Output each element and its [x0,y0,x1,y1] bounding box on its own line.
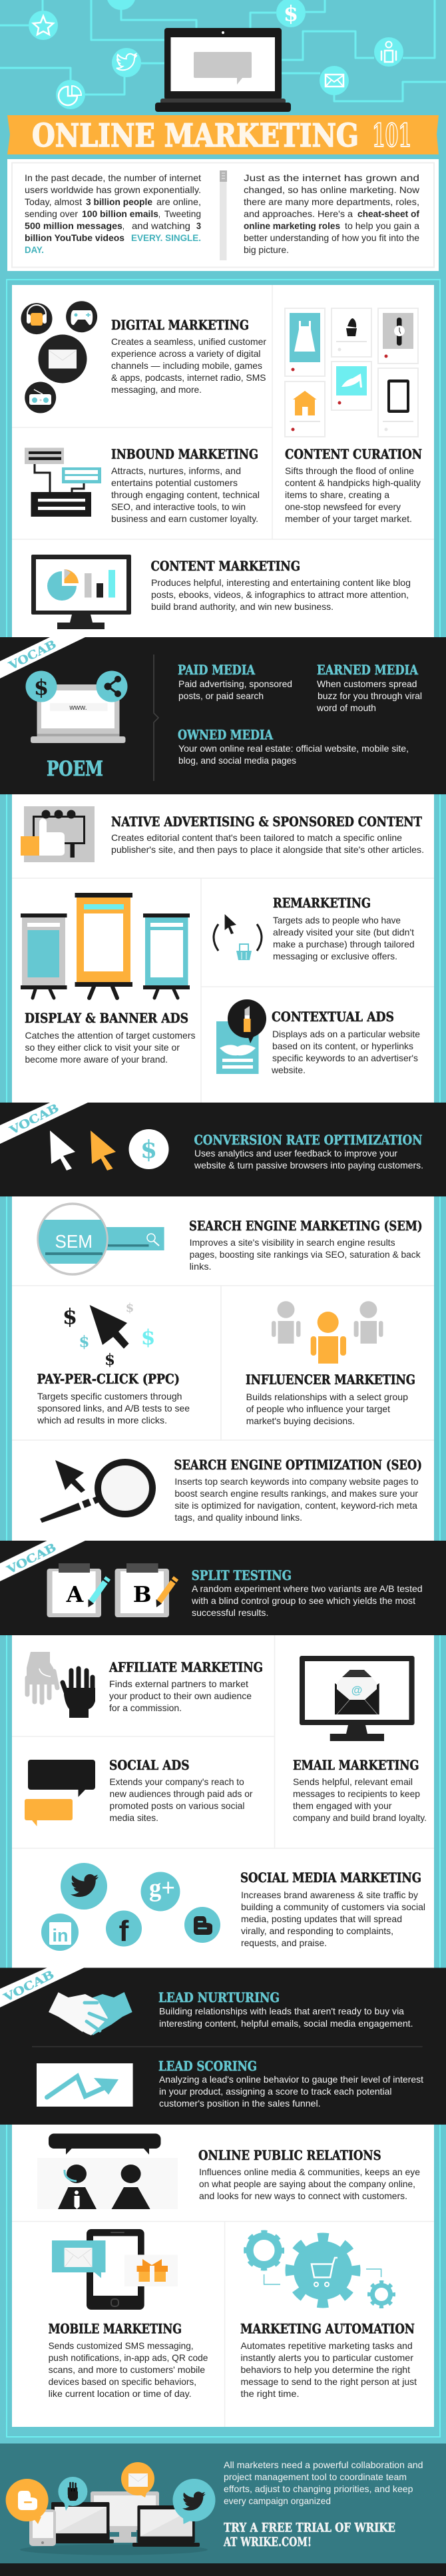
text: online public relations: on what people are saying about the company online, [199,2179,415,2189]
heading: pay-per-click: PAY-PER-CLICK (PPC) [37,1371,180,1387]
text: conversion rate optimization: Uses analytics and user feedback to improve your [194,1148,397,1159]
text: mobile marketing: like current location or time of day. [49,2388,192,2399]
intro text left: 500 million messages [25,220,122,231]
panel: native advertising [21,806,424,862]
intro text left: Tweeting [164,208,201,219]
icon: cursor and magnifying glass [40,1460,152,1523]
heading: search engine marketing: SEARCH ENGINE MARKETING (SEM) [189,1218,423,1234]
heading: remarketing: REMARKETING [273,895,371,911]
text: search engine marketing: links. [190,1261,212,1272]
text: inbound marketing: business and earn customer loyalty. [111,513,258,524]
panel: influencer marketing [246,1301,415,1426]
icon: dollar circle: $ [140,1136,157,1164]
text: remarketing: make a purchase) through tailored [273,939,415,949]
text: contextual ads: specific keywords to an advertiser's [272,1053,418,1063]
text: social ads [109,1776,253,1823]
text: mobile marketing: scans, and more to customers' mobile [49,2364,205,2375]
ribbon: vocab: VOCAB [6,638,59,673]
icon: twitter circle [61,1863,107,1910]
text: contextual ads: website. [271,1065,306,1075]
heading: lead scoring: LEAD SCORING [158,2058,257,2074]
heading: content curation: CONTENT CURATION [285,446,422,462]
text: online public relations: Influences online media & communities, keeps an eye [199,2167,420,2177]
intro text left: sending over [25,208,78,219]
text: search engine marketing: Improves a site's visibility in search engine results [190,1237,395,1248]
text: social media marketing: Increases brand awareness & site traffic by [241,1890,418,1900]
icon: speech bubbles [25,1760,95,1826]
text: footer message: efforts, adjust to changing priorities, and keep [224,2483,413,2494]
icon: clipboard B [115,1563,176,1617]
term: earned media: buzz for you through viral [318,690,422,701]
icon: dollar circle [129,1129,169,1169]
icon: clipboard A: A [66,1581,84,1607]
text: affiliate marketing: your product to their own audience [109,1690,252,1701]
text: marketing automation: Automates repetitive marketing tasks and [241,2340,413,2351]
text: mobile marketing: push notifications, in-app ads, QR code [49,2352,208,2363]
heading: affiliate marketing: AFFILIATE MARKETING [109,1659,263,1675]
intro text right: there are many more departments, roles, [244,196,419,207]
illustration: devices with social bubbles [6,2462,215,2555]
panel: content curation [285,308,422,524]
vocab band: POEM [0,637,446,794]
icon: blogger bubble [6,2479,49,2524]
text: pay-per-click: sponsored links, and A/B tests to see [37,1403,190,1414]
text: conversion rate optimization [194,1148,423,1170]
call to action: free trial: AT WRIKE.COM! [223,2535,312,2549]
panel: online public relations [37,2133,420,2209]
term: earned media: EARNED MEDIA [317,662,419,678]
text: contextual ads: based on its content, or hyperlinks [272,1041,413,1051]
text: affiliate marketing [109,1678,252,1713]
text: content curation: content & handpicks high-quality [285,477,421,488]
text: native advertising: publisher's site, and then pays to place it alongside that site's other articles. [111,844,424,855]
icon: cursor and basket cycle [214,914,262,960]
icon: google plus circle [141,1872,180,1911]
text: affiliate marketing: for a commission. [109,1702,182,1713]
icon: lipstick ad [216,999,266,1074]
intro text right: big picture. [244,244,289,255]
text: conversion rate optimization: website & turn passive browsers into paying customers. [194,1160,423,1170]
icon: banner stands [21,893,190,998]
text: inbound marketing [111,465,260,524]
text: split testing: successful results. [192,1607,268,1618]
heading: mobile marketing: MOBILE MARKETING [49,2321,182,2337]
text: social ads: promoted posts on various social [109,1800,245,1811]
vocab band: split testing [0,1541,446,1635]
text: digital marketing: Creates a seamless, unified customer [111,336,266,347]
text: social ads: media sites. [109,1812,158,1823]
text: inbound marketing: through engaging content, technical [111,489,260,500]
term: owned media: blog, and social media pages [178,755,296,766]
heading: influencer marketing: INFLUENCER MARKETING [246,1372,415,1388]
text: search engine optimization: site is optimized for navigation, content, keyword-rich meta [174,1500,417,1511]
icon: facebook circle [106,1911,142,1947]
heading: digital marketing: DIGITAL MARKETING [111,317,249,333]
heading: conversion rate optimization: CONVERSION RATE OPTIMIZATION [194,1132,422,1148]
text: pay-per-click [37,1391,190,1425]
panel: marketing automation [240,2232,417,2399]
panel: pay-per-click [37,1301,190,1425]
text: footer message: project management tool to coordinate team [224,2471,407,2482]
text: search engine optimization [174,1476,419,1523]
panel: content marketing [31,555,411,629]
circuit lines [0,0,446,101]
text: lead scoring: Analyzing a lead's online behavior to gauge their level of interest [159,2074,423,2085]
icon: mail node [320,66,349,95]
text: online public relations: and looks for new ways to connect with customers. [199,2190,407,2201]
panel: remarketing [214,895,415,961]
text: inbound marketing: entertains potential customers [111,477,238,488]
intro text left: , [122,220,124,231]
text: content curation: member of your target market. [285,513,412,524]
intro text right: changed, so has online marketing. Now [244,184,420,195]
heading: search engine optimization: SEARCH ENGINE OPTIMIZATION (SEO) [174,1457,422,1473]
term: paid media: posts, or paid search [178,690,264,701]
text: search engine optimization: Inserts top search keywords into company website pages to [174,1476,419,1487]
icon: facebook circle: f [119,1915,129,1947]
icon: clipboard A [47,1563,108,1617]
term: paid media [178,662,292,701]
icon: monitor with envelope: @ [351,1684,362,1696]
panel: introduction [7,159,439,271]
icon: mail bubble [121,2462,154,2497]
icon: digital channels [21,301,97,413]
ribbon: vocab [0,637,85,678]
icon: top node [107,0,136,10]
intro text right [244,172,420,255]
icon: blogger circle [184,1907,220,1943]
term: earned media [316,662,422,713]
term: paid media: Paid advertising, sponsored [178,678,292,689]
text: display and banner ads: Catches the attention of target customers [25,1030,196,1041]
heading: split testing: SPLIT TESTING [192,1567,292,1583]
icon: hands [27,1652,95,1718]
heading: content marketing: CONTENT MARKETING [150,558,300,574]
text: display and banner ads [25,1030,196,1065]
ribbon: vocab [0,1101,88,1144]
icon: cursor with dollars: $ [63,1304,77,1329]
panel: affiliate marketing [27,1652,263,1718]
intro text left [25,172,201,255]
text: display and banner ads: so they either click to visit your site or [25,1042,180,1053]
text: digital marketing: messaging, and more. [111,384,202,395]
text: email marketing: messages to recipients to keep [293,1788,420,1799]
term: earned media: word of mouth [316,702,376,713]
icon: white cursor [50,1131,75,1170]
icon: pie chart node [56,80,85,109]
intro text right: better understanding of how you fit into the [244,232,419,243]
text: footer message [224,2459,423,2506]
text: content curation [285,465,421,524]
text: footer message: All marketers need a powerful collaboration and [224,2459,423,2470]
text: marketing automation: the right time. [241,2388,300,2399]
intro text left: Today, almost [25,196,82,207]
text: remarketing: messaging or exclusive offers. [273,951,397,961]
intro text left: billion YouTube videos [25,232,124,243]
heading: email marketing: EMAIL MARKETING [293,1757,419,1773]
intro text right: and approaches. Here's a [244,208,353,219]
icon: laptop with paid and shared circles [25,671,128,743]
icon: cursor with dollars: $ [79,1333,90,1351]
heading: social ads: SOCIAL ADS [109,1757,190,1773]
icon: linkedin circle [41,1914,79,1951]
icon: dollar node: $ [284,1,298,26]
text: marketing automation: message to send to the right person at just [241,2376,417,2387]
heading: contextual ads: CONTEXTUAL ADS [272,1009,394,1025]
icon: gears with cart [246,2232,394,2306]
text: inbound marketing: SEO, and interactive tools, to win [111,501,246,512]
text: influencer marketing: Builds relationships with a select group [246,1392,408,1402]
term: owned media: OWNED MEDIA [178,727,274,743]
icon: monitor with envelope [300,1656,415,1741]
text: lead nurturing: interesting content, helpful emails, social media engagement. [159,2018,413,2029]
intro text left: and watching [132,220,190,231]
text: digital marketing: experience across a variety of digital [111,348,261,359]
icon: trend chart [37,2063,133,2107]
icon: cursor with dollars: $ [141,1326,155,1350]
icon: billboard thumbs up [21,806,95,862]
text: content curation: items to share, creating a [285,489,389,500]
icon: laptop with paid and shared circles: www. [69,704,87,712]
text: mobile marketing [49,2340,208,2399]
panel: inbound marketing [25,446,260,524]
intro text left: 3 billion people [86,196,152,207]
icon: monitor with charts [31,555,131,629]
text: native advertising [111,832,424,855]
label: POEM: POEM [47,757,103,781]
icon: cursor with dollars: $ [126,1301,134,1315]
text: influencer marketing: market's buying decisions. [246,1416,355,1426]
intro text right: cheat-sheet of [357,208,419,219]
intro text right: online marketing roles [244,220,340,231]
text: footer message: every campaign organized [224,2495,331,2506]
intro text left: In the past decade, the number of internet [25,172,201,183]
text: social media marketing [241,1890,425,1948]
icon: laptop with speech bubble [155,28,291,112]
heading: display and banner ads: DISPLAY & BANNER ADS [25,1010,188,1026]
text: split testing [191,1583,423,1618]
icon: cursor with dollars: $ [105,1351,115,1369]
text: content marketing: build brand authority, and win new business. [151,601,334,612]
icon: SEM search magnifier: SEM [55,1231,93,1252]
intro text right: Just as the internet has grown and [244,172,419,183]
panel: search engine optimization [40,1457,422,1523]
intro text left: EVERY. SINGLE. [131,232,201,243]
text: search engine optimization: tags, and quality inbound links. [174,1512,302,1523]
heading: social media marketing: SOCIAL MEDIA MARKETING [240,1870,421,1886]
text: email marketing: Sends helpful, relevant email [293,1776,413,1787]
heading: online public relations: ONLINE PUBLIC RELATIONS [198,2147,381,2163]
text: lead nurturing: Building relationships with leads that aren't ready to buy via [159,2005,404,2016]
intro text left: 100 billion emails [82,208,158,219]
term: owned media: Your own online real estate: official website, mobile site, [178,743,409,754]
term: paid media: PAID MEDIA [178,662,256,678]
text: influencer marketing [246,1392,408,1426]
text: social ads: new audiences through paid ads or [109,1788,253,1799]
text: marketing automation: instantly alerts you to particular customer [241,2352,413,2363]
text: digital marketing: & apps, podcasts, internet radio, SMS [111,372,266,383]
icon: star node [29,11,58,40]
term: earned media: When customers spread [317,678,417,689]
text: split testing: with a blind control group to see which yields the most [191,1595,415,1606]
text: lead scoring: customer's position in the sales funnel. [159,2098,321,2109]
vocab band: conversion rate optimization [0,1101,446,1196]
icon: person node [374,37,403,67]
text: content curation: one-stop newsfeed for every [285,501,401,512]
text: content curation: Sifts through the flood of online [285,465,414,476]
title text: ONLINE MARKETING [32,117,359,154]
icon: pin boards [285,308,418,437]
icon: google plus circle: g+ [149,1874,175,1902]
intro text left: users worldwide has grown exponentially. [25,184,201,195]
text: lead nurturing [159,2005,413,2029]
text: lead scoring: in your product, assigning a score to track each potential [159,2086,391,2097]
text: contextual ads [271,1029,420,1075]
text: contextual ads: Displays ads on a particular website [272,1029,420,1039]
text: content marketing: Produces helpful, interesting and entertaining content like blog [151,577,411,588]
icon: orange cursor [91,1131,116,1170]
intro text left: DAY. [25,244,44,255]
footer: call to action [0,2444,446,2576]
icon: linkedin circle: in [52,1926,68,1945]
text: email marketing: them engaged with your [293,1800,392,1811]
text: social media marketing: media, posting updates that will spread [241,1914,402,1924]
ribbon: vocab: VOCAB [7,1101,61,1138]
text: marketing automation: behaviors to help you determine the right [241,2364,410,2375]
text: digital marketing [111,336,266,395]
text: native advertising: Creates editorial content that's been tailored to match a specific online [111,832,402,843]
text: content marketing: posts, ebooks, videos, & infographics to attract more attention, [151,589,409,600]
panel: digital marketing [21,301,266,413]
text: social media marketing: requests, and praise. [241,1937,327,1948]
text: affiliate marketing: Finds external partners to market [109,1678,248,1689]
icon: laptop with paid and shared circles: $ [34,674,49,700]
icon: clipboard B: B [133,1581,152,1607]
ribbon: vocab [0,1541,85,1581]
vocab band: lead nurturing and scoring [0,1968,446,2125]
heading: inbound marketing: INBOUND MARKETING [111,446,258,462]
intro text left: , [158,208,160,219]
icon: hand bubble [58,2477,87,2511]
text: lead scoring [159,2074,423,2109]
icon: dollar node [276,0,306,27]
panel: mobile marketing [49,2229,208,2399]
text: mobile marketing: Sends customized SMS messaging, [49,2340,194,2351]
panel: display and banner ads [21,893,196,1065]
panel: social media marketing [41,1863,425,1951]
text: pay-per-click: which ad results in more clicks. [37,1415,167,1425]
text: remarketing [273,915,415,961]
text: inbound marketing: Attracts, nurtures, informs, and [111,465,241,476]
text: mobile marketing: devices based on specific behaviors, [49,2376,196,2387]
text: digital marketing: channels — including mobile, games [111,360,262,371]
heading: lead nurturing: LEAD NURTURING [158,1989,280,2005]
ribbon: vocab: VOCAB [4,1541,59,1577]
text: email marketing: company and build brand loyalty. [293,1812,427,1823]
icon: phone with message and gift [52,2229,178,2310]
text: search engine marketing: pages, boosting site rankings via SEO, saturation & back [190,1249,421,1260]
intro text right: to help you gain a [345,220,419,231]
text: email marketing [293,1776,427,1823]
panel: social ads [25,1757,253,1826]
icon: handshake [49,1992,132,2035]
text: remarketing: already visited your site (but didn't [273,927,414,937]
scrollbar divider [220,170,227,260]
text: influencer marketing: of people who influence your target [246,1404,390,1414]
panel: contextual ads [216,999,420,1075]
icon: two people with speech bubble [37,2133,178,2209]
ribbon: vocab [0,1968,84,2007]
hero: circuit network and laptop [0,0,446,112]
term: owned media [178,727,409,766]
title banner [7,115,439,154]
text: pay-per-click: Targets specific customers through [37,1391,182,1402]
text: social ads: Extends your company's reach to [109,1776,244,1787]
text: split testing: A random experiment where two variants are A/B tested [192,1583,423,1594]
icon: inbound funnel boxes [25,447,101,517]
text: search engine marketing [190,1237,421,1272]
call to action: free trial [223,2521,395,2549]
text: display and banner ads: become more aware of your brand. [25,1054,168,1065]
intro text left: 3 [196,220,201,231]
icon: twitter node [112,48,141,77]
panel: email marketing [293,1656,427,1823]
text: online public relations [199,2167,420,2201]
title number: 101 [372,117,411,154]
heading: native advertising: NATIVE ADVERTISING & SPONSORED CONTENT [111,814,423,830]
icon: twitter bubble [173,2479,216,2524]
call to action: free trial: TRY A FREE TRIAL OF WRIKE [224,2521,395,2535]
text: search engine optimization: boost search engine results rankings, and makes sure your [174,1488,418,1499]
ribbon: vocab: VOCAB [1,1968,57,2005]
text: social media marketing: virally, and responding to complaints, [241,1926,393,1936]
text: marketing automation [241,2340,417,2399]
text: remarketing: Targets ads to people who have [273,915,401,925]
text: social media marketing: building a community of customers via social [241,1902,425,1912]
panel: search engine marketing [33,1204,423,1274]
intro text left: are online, [156,196,201,207]
heading: marketing automation: MARKETING AUTOMATION [240,2321,415,2337]
icon: people with orange influencer [272,1301,383,1364]
icon: cursor with dollars [63,1301,155,1369]
text: content marketing [151,577,411,612]
icon: SEM search magnifier [33,1204,164,1274]
